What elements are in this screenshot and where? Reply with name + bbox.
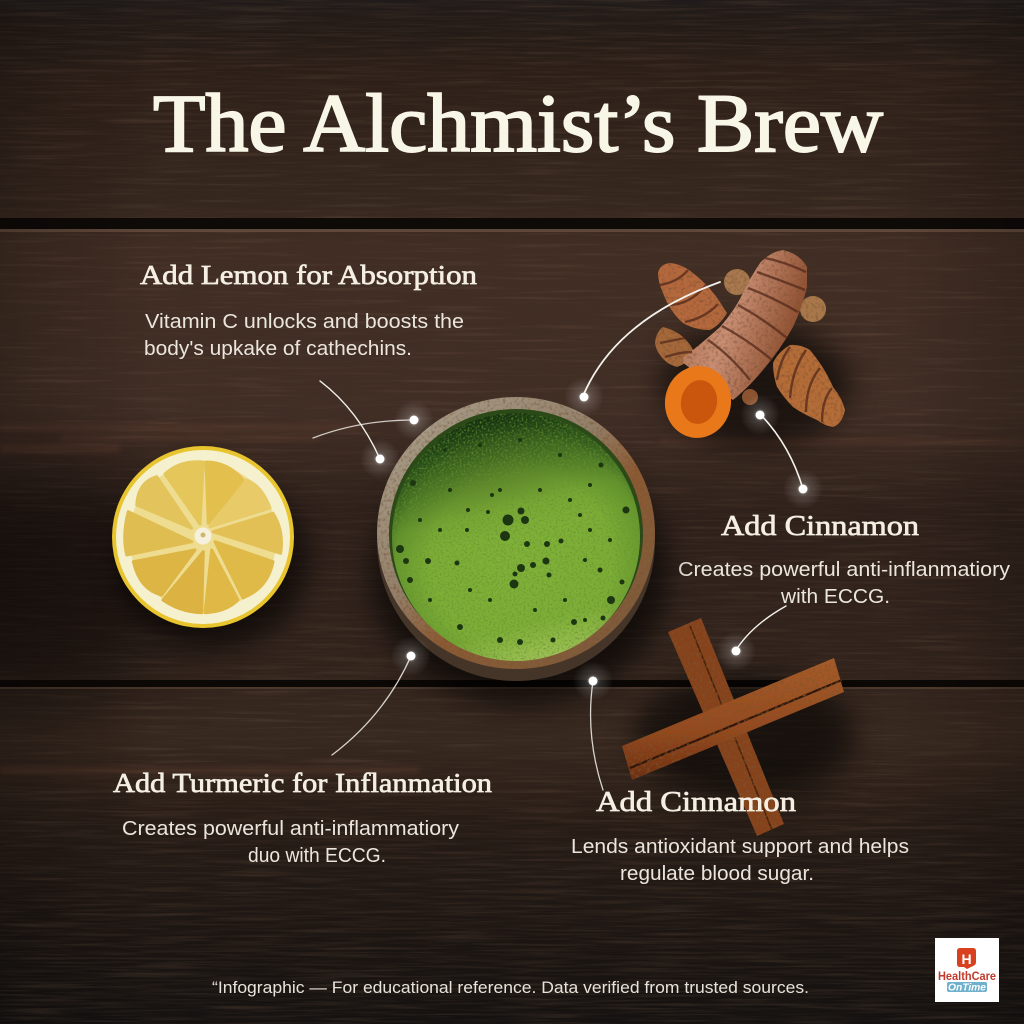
text block: add cinnamon right: with ECCG.	[780, 586, 890, 608]
text block: add turmeric	[122, 818, 459, 867]
heading: add lemon: Add Lemon for Absorption	[140, 260, 478, 290]
text block: add cinnamon lower: Lends antioxidant support and helps	[571, 836, 909, 858]
footer disclaimer: “Infographic — For educational reference. Data verified from trusted sources.	[212, 978, 809, 997]
text block: add lemon: Vitamin C unlocks and boosts the	[145, 311, 464, 333]
matcha surface	[392, 413, 640, 661]
turmeric lobes and body	[655, 250, 845, 427]
logo: HealthCare OnTime	[935, 938, 999, 1002]
cinnamon sticks	[622, 618, 855, 836]
panel: add turmeric text	[113, 768, 493, 867]
icon: H shield: H	[961, 951, 972, 967]
turmeric root	[655, 250, 850, 447]
title: The Alchmist’s Brew	[153, 77, 883, 169]
panel: add cinnamon text, right	[678, 511, 1010, 608]
text block: add lemon	[144, 311, 464, 360]
heading: add cinnamon lower: Add Cinnamon	[596, 787, 796, 818]
connector lines	[313, 282, 803, 790]
matcha bowl	[372, 397, 668, 705]
logo: HealthCare OnTime: OnTime	[948, 982, 986, 994]
heading: add turmeric: Add Turmeric for Inflanmation	[113, 768, 493, 798]
text block: add cinnamon right	[678, 559, 1010, 608]
vertical stick	[668, 618, 784, 836]
text block: add cinnamon lower	[571, 836, 909, 885]
glowing connector dots	[360, 377, 823, 701]
bowl body	[377, 401, 655, 681]
turmeric cut face	[659, 361, 737, 443]
bubbles	[396, 438, 630, 645]
text block: add turmeric: Creates powerful anti-inflammatiory	[122, 818, 459, 840]
heading: add cinnamon right: Add Cinnamon	[721, 511, 919, 542]
lemon slice	[112, 446, 308, 648]
horizontal stick	[622, 658, 844, 780]
text block: add cinnamon lower: regulate blood sugar.	[620, 863, 814, 885]
bowl rim	[377, 397, 655, 669]
lemon segments	[125, 462, 281, 613]
logo: HealthCare OnTime: HealthCare	[938, 971, 996, 983]
text block: add cinnamon right: Creates powerful anti-inflanmatiory	[678, 559, 1010, 581]
turmeric ridges	[660, 258, 832, 422]
heading and text over cinnamon	[571, 787, 909, 885]
text block: add turmeric: duo with ECCG.	[248, 845, 386, 867]
panel: add lemon text	[140, 260, 478, 360]
text block: add lemon: body's upkake of cathechins.	[144, 338, 412, 360]
